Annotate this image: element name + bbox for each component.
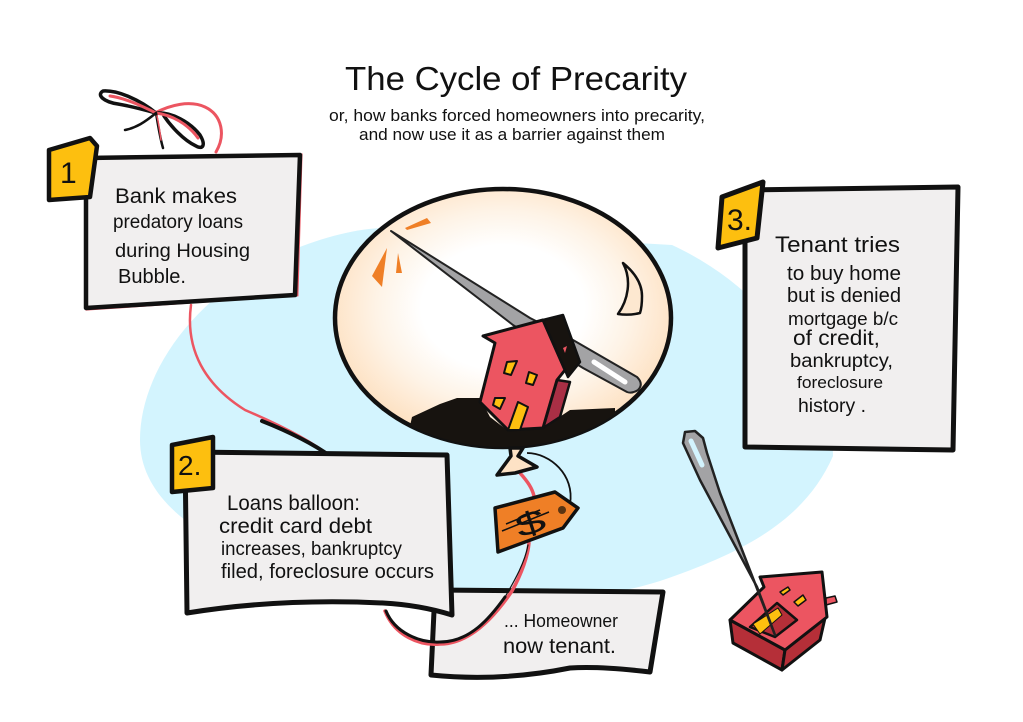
- box 1 text: [113, 185, 250, 288]
- subtitle: or, how banks forced homeowners into precarity,: [329, 106, 705, 125]
- box 3 text: bankruptcy,: [790, 351, 893, 372]
- badge 2: 2.: [178, 450, 201, 481]
- chimney: [826, 596, 837, 605]
- door: [753, 608, 782, 634]
- box 1: [86, 155, 300, 308]
- string from box 1 to box 2: [190, 305, 330, 456]
- price tag string: [527, 453, 571, 504]
- box 3 text: Tenant tries: [775, 232, 900, 257]
- house roof: [730, 572, 827, 650]
- box 2 text: [219, 492, 434, 583]
- badge 3: [718, 182, 763, 248]
- subtitle: and now use it as a barrier against them: [359, 125, 665, 144]
- badge 1: 1: [60, 157, 77, 190]
- background blob: [140, 228, 833, 603]
- price tag: $: [511, 501, 551, 545]
- box 3 text: history .: [798, 396, 866, 417]
- balloon highlight: [618, 263, 642, 315]
- box 3 text: of credit,: [793, 327, 880, 350]
- box 2: [185, 452, 452, 615]
- box 2 text: filed, foreclosure occurs: [221, 561, 434, 583]
- price tag: [495, 492, 578, 552]
- house side: [782, 618, 825, 670]
- house walls: [730, 620, 785, 670]
- balloon: [335, 189, 671, 470]
- box 1 text: Bubble.: [118, 266, 186, 288]
- box 3 text: but is denied: [787, 285, 901, 307]
- box 3 text: to buy home: [787, 263, 901, 285]
- box 2 text: Loans balloon:: [227, 492, 360, 515]
- balloon body: [335, 189, 671, 447]
- string from box 2 to balloon: [385, 473, 534, 644]
- badge 1: [49, 138, 97, 200]
- badge 3: 3.: [727, 204, 752, 237]
- ground mound: [410, 398, 615, 445]
- title: The Cycle of Precarity: [345, 60, 688, 97]
- ribbon bow: [100, 91, 221, 152]
- hole: [750, 603, 797, 637]
- box 2 text: increases, bankruptcy: [221, 539, 402, 560]
- box 1 text: predatory loans: [113, 212, 243, 233]
- needle through balloon: [391, 231, 641, 393]
- homeowner text: now tenant.: [503, 635, 616, 658]
- box 1 text: during Housing: [115, 241, 250, 262]
- box 2 text: credit card debt: [219, 515, 372, 538]
- box 3: [745, 187, 958, 450]
- needle: [683, 431, 775, 635]
- homeowner text: [503, 611, 618, 658]
- windows: [780, 587, 806, 606]
- box 3 text: mortgage b/c: [788, 309, 898, 329]
- tilted house: [480, 315, 580, 430]
- fallen house with needle: [683, 431, 837, 670]
- burst shards: [372, 218, 431, 287]
- box 3 text: foreclosure: [797, 373, 883, 392]
- box 3 text: [775, 232, 901, 417]
- balloon knot: [497, 448, 537, 475]
- badge 2: [172, 437, 213, 492]
- homeowner text: ... Homeowner: [504, 611, 618, 631]
- box 1 text: Bank makes: [115, 185, 237, 208]
- box homeowner: [431, 590, 663, 677]
- subtitle: [329, 106, 705, 144]
